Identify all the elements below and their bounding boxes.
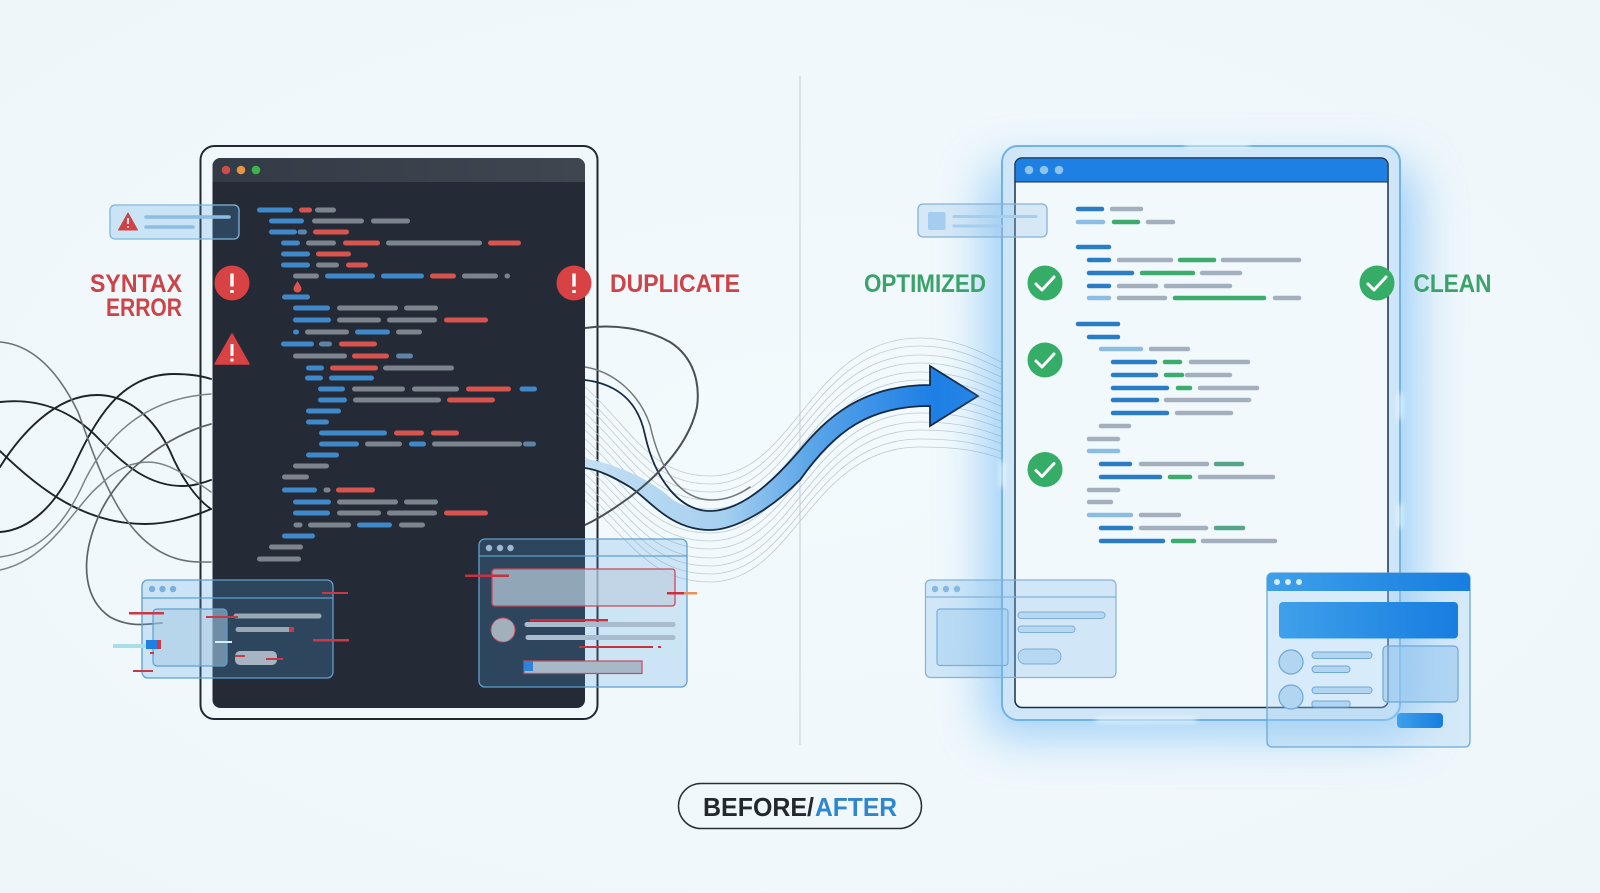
- icon: check 1: [1028, 266, 1062, 300]
- icon: check 2: [1028, 342, 1062, 378]
- panel: before device frame: [200, 146, 598, 719]
- placeholder lines: [954, 216, 1036, 226]
- window dots: [1274, 579, 1302, 585]
- code lines: red error tokens: [302, 210, 518, 513]
- code lines: grey tokens: [260, 210, 520, 559]
- clean window: left: [926, 580, 1116, 678]
- code lines: light blue tokens: [1078, 222, 1141, 515]
- label: duplicate: DUPLICATE: [610, 270, 740, 298]
- banner with red outline: [492, 569, 675, 606]
- tangled lines: left of before panel: [0, 342, 211, 625]
- icon: check 3: [1028, 452, 1062, 487]
- icon: error circle: [214, 266, 250, 300]
- window dots: [932, 586, 960, 592]
- blue glitch: [524, 661, 533, 671]
- card: warning notification: [110, 205, 239, 239]
- small red marker: [294, 281, 302, 293]
- window dots: [222, 166, 260, 174]
- white glitch bar: [215, 641, 232, 643]
- badge: before / after: AFTER: [815, 792, 897, 822]
- panel: after device frame with glow: [984, 143, 1418, 737]
- code lines: grey tokens: [1089, 209, 1299, 541]
- code lines: teal tokens: [1216, 464, 1243, 528]
- icon: warning triangle: [215, 334, 249, 364]
- label: clean: CLEAN: [1414, 270, 1492, 298]
- pill button: [1018, 649, 1061, 664]
- editor title bar: [212, 158, 585, 182]
- placeholder lines: [146, 217, 229, 227]
- label: optimized: OPTIMIZED: [864, 270, 986, 298]
- icon: check clean: [1360, 266, 1394, 300]
- label: syntax error: ERROR: [106, 294, 182, 322]
- editor body: [1015, 158, 1388, 708]
- code lines: green tokens: [1114, 222, 1264, 541]
- banner: [1279, 602, 1458, 638]
- highlight segments: [1000, 143, 1402, 722]
- label: syntax error: SYNTAX: [90, 270, 182, 298]
- before code editor: [212, 158, 585, 708]
- text bars: [236, 616, 319, 630]
- avatar: [491, 618, 515, 642]
- glitch marks: [129, 592, 349, 672]
- image placeholder: [153, 609, 227, 666]
- card: notification clean: [918, 204, 1047, 237]
- icon: small warning triangle: [118, 213, 138, 230]
- action button: [1397, 713, 1443, 728]
- glitch marks: [465, 574, 685, 648]
- icon: square: [928, 212, 946, 230]
- badge: before / after: BEFORE/: [703, 792, 814, 822]
- text bars: [1018, 612, 1105, 618]
- image placeholder: [1383, 646, 1458, 702]
- editor title bar: [1015, 158, 1388, 182]
- button with red outline: [524, 661, 642, 674]
- tangled lines: right of before panel: [585, 327, 750, 525]
- code lines: blue tokens: [260, 210, 534, 536]
- smeared button: [235, 651, 277, 665]
- text bars: [1312, 652, 1372, 707]
- badge: before / after: [678, 784, 922, 828]
- broken window: bottom right: [465, 539, 697, 687]
- contour lines behind transformation arrow: [585, 338, 1012, 582]
- window title bar: [1267, 573, 1470, 591]
- window dots: [1025, 166, 1063, 174]
- avatars: [1279, 650, 1303, 709]
- code lines: blue tokens: [1078, 209, 1167, 541]
- window dots: [149, 586, 176, 592]
- image placeholder: [937, 609, 1008, 666]
- clean window: right: [1267, 573, 1470, 747]
- glass bezel: [1002, 146, 1400, 720]
- after code editor: [1015, 158, 1388, 708]
- code lines: muted tokens: [300, 232, 534, 444]
- window dots: [486, 545, 514, 551]
- broken window: bottom left: [113, 580, 349, 678]
- transformation arrow: [585, 366, 978, 530]
- text bars: [527, 624, 673, 638]
- label: syntax error: [90, 270, 182, 322]
- icon: duplicate error circle: [556, 266, 592, 300]
- blue glow: [984, 165, 1418, 737]
- blue glitch square: [146, 640, 157, 649]
- editor body: [212, 158, 585, 708]
- cyan glitch bar: [113, 644, 147, 648]
- orange glitch: [684, 592, 697, 594]
